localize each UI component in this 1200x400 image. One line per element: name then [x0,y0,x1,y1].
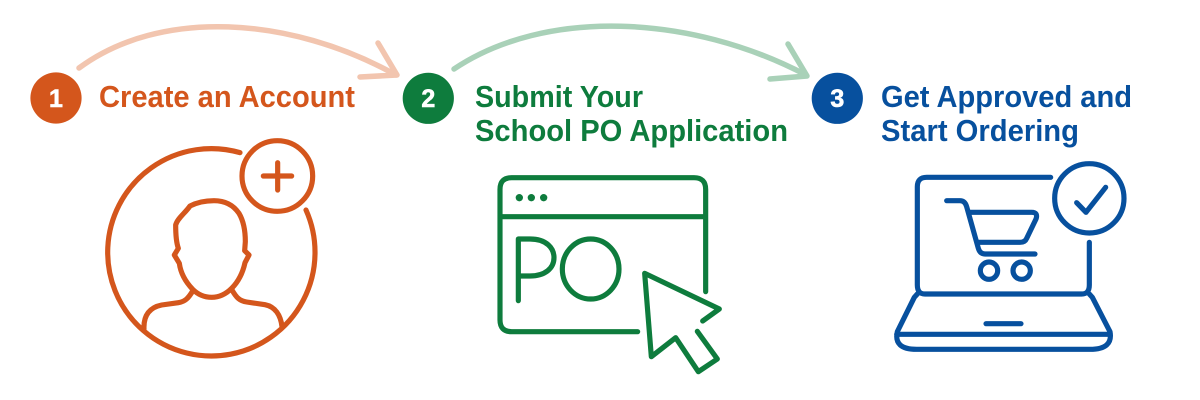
letters P and O drawn as PO [518,239,619,301]
head [174,201,249,297]
title: Submit Your School PO Application: Submit Your [475,80,643,114]
title: Get Approved and Start Ordering [881,80,1132,148]
icon: user with plus [108,141,315,356]
title: Create an Account: Create an Account [99,80,355,114]
arrow: step 1 to step 2 [79,27,397,77]
number badge 3 [812,73,863,124]
icon: laptop with cart and check [897,164,1124,349]
window dots [516,194,547,201]
outer ring [108,149,315,356]
check badge [1055,164,1124,233]
title: Submit Your School PO Application: School PO Application [475,114,788,148]
number badge 1 [30,72,82,124]
title: Submit Your School PO Application [475,80,788,148]
title: Get Approved and Start Ordering: Start Ordering [881,114,1079,148]
step 1 heading [30,72,355,124]
step 3 heading [812,73,1132,148]
icon: PO browser window with cursor [500,178,719,372]
number badge 3: 3 [830,85,844,113]
arrow: step 2 to step 3 [454,26,807,79]
window frame [500,178,706,332]
shoulders [144,289,282,329]
number badge 2 [403,73,454,124]
number badge 2: 2 [421,85,435,113]
shopping cart [947,201,1037,279]
title: Get Approved and Start Ordering: Get Approved and [881,80,1132,114]
plus badge [242,141,313,211]
laptop screen [917,177,1089,294]
laptop base [897,294,1110,349]
cursor arrow [645,273,719,372]
number badge 1: 1 [49,85,63,113]
step 2 heading [403,73,788,148]
